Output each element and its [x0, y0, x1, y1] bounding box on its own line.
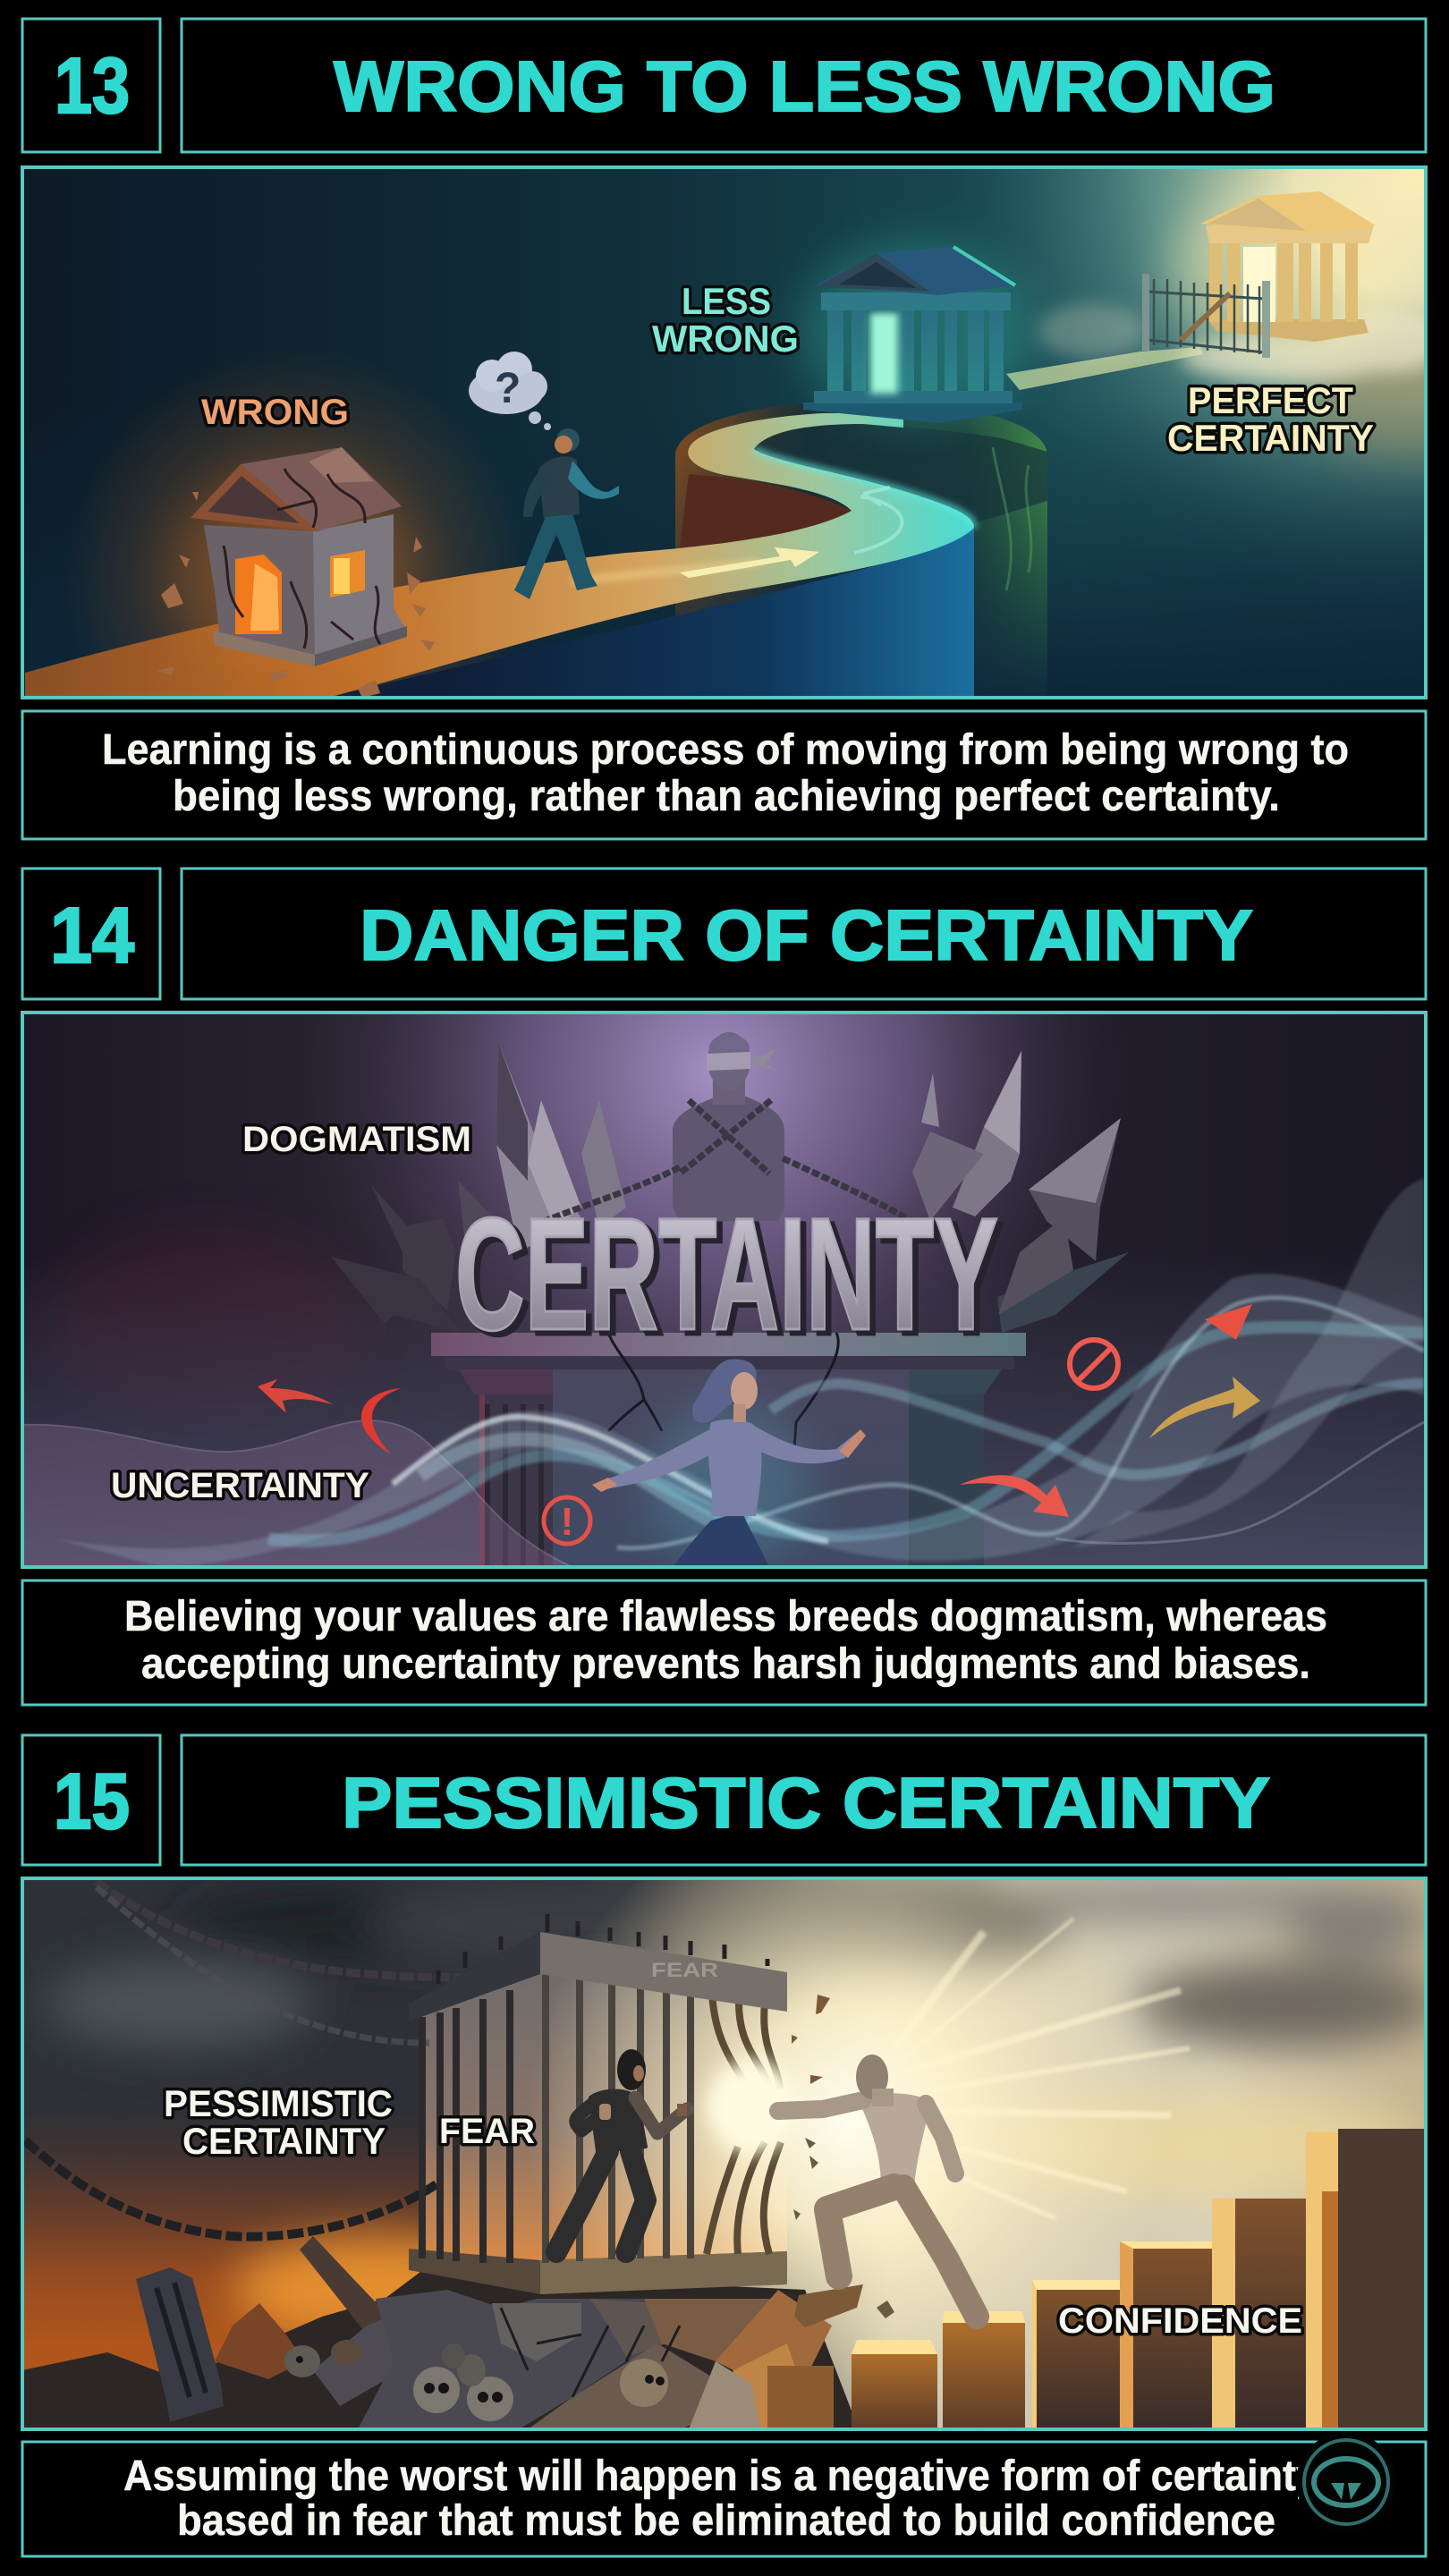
impact burst — [707, 1995, 894, 2318]
label: pessimistic certainty: CERTAINTY — [182, 2120, 386, 2162]
section 13 caption: being less wrong, rather than achieving perfect certainty. — [173, 773, 1280, 820]
glowing steps — [767, 2129, 1426, 2429]
section 13 title: WRONG TO LESS WRONG — [334, 47, 1275, 126]
cliff cylinder — [675, 401, 1047, 698]
block under foot — [794, 2284, 863, 2327]
label: pessimistic certainty — [164, 2082, 393, 2162]
running woman — [592, 1360, 866, 1567]
temple: less wrong — [798, 242, 1030, 423]
flowing uncertainty waves — [22, 1178, 1424, 1567]
warning icon — [544, 1497, 590, 1544]
label: less wrong: WRONG — [652, 318, 799, 360]
panel: wrong to less wrong illustration — [24, 169, 1424, 696]
label: less wrong: LESS — [682, 280, 771, 322]
winding road — [25, 413, 974, 697]
pit — [680, 474, 852, 547]
locked gate — [1142, 274, 1270, 358]
section 15 title: PESSIMISTIC CERTAINTY — [342, 1763, 1270, 1843]
red arc and arrows — [258, 1304, 1260, 1517]
section 13 number box — [22, 19, 160, 152]
rubble fragments — [157, 492, 435, 698]
section 13 caption — [22, 711, 1426, 839]
temple: perfect certainty — [1172, 179, 1404, 358]
section 15 caption: based in fear that must be eliminated to build confidence — [177, 2497, 1275, 2545]
chain 1 — [97, 1882, 499, 1978]
section 15 title — [182, 1735, 1426, 1865]
clouds — [1038, 304, 1449, 381]
path to perfect certainty — [1006, 347, 1203, 390]
section 15 number box: 15 — [54, 1757, 130, 1845]
walking man — [514, 428, 619, 599]
prisoner in cage — [556, 2049, 687, 2252]
section 13 number box: 13 — [55, 41, 130, 130]
carved word certainty: CERTAINTY — [461, 1189, 1004, 1368]
section 14 number box: 14 — [50, 891, 134, 979]
road arrow — [680, 547, 819, 578]
panel: pessimistic certainty illustration — [22, 1798, 1440, 2442]
label: uncertainty: UNCERTAINTY — [111, 1466, 369, 1505]
section 14 number box — [22, 869, 160, 999]
section 14 title: DANGER OF CERTAINTY — [360, 895, 1253, 975]
column and pedestal — [431, 1333, 1026, 1567]
sun rays — [894, 1919, 1190, 2218]
hero figure breaking the cage — [778, 2055, 977, 2317]
section 14 caption: Believing your values are flawless breeds dogmatism, whereas — [124, 1593, 1327, 1640]
carved word certainty — [455, 1184, 1004, 1368]
cracked house — [170, 447, 420, 680]
label: perfect certainty: CERTAINTY — [1167, 417, 1374, 459]
chains on figure — [545, 1100, 917, 1224]
lower blue cliff — [322, 523, 974, 698]
cage — [409, 1914, 787, 2294]
blindfolded figure — [673, 1032, 784, 1221]
cage: FEAR — [651, 1959, 718, 1981]
skull group — [284, 2340, 668, 2421]
icon: logo badge — [1296, 2432, 1396, 2532]
distant chains — [25, 1882, 499, 2237]
thought bubble with question mark — [469, 352, 551, 430]
section 14 caption: accepting uncertainty prevents harsh judgments and biases. — [141, 1640, 1310, 1688]
broken column — [136, 2267, 224, 2422]
skulls — [284, 2340, 668, 2421]
label: pessimistic certainty: PESSIMISTIC — [164, 2082, 393, 2124]
light behind cage bars — [420, 1973, 787, 2263]
section 14 title — [182, 869, 1426, 999]
panel: danger of certainty illustration — [22, 662, 1426, 1567]
label: confidence: CONFIDENCE — [1058, 2301, 1302, 2341]
carved word certainty: CERTAINTY — [455, 1184, 998, 1363]
label: fear: FEAR — [439, 2112, 535, 2151]
thought bubble with question mark: ? — [495, 365, 521, 412]
no sign icon — [1070, 1340, 1118, 1388]
section 15 caption: Assuming the worst will happen is a negative form of certainty — [123, 2453, 1318, 2500]
label: less wrong — [652, 280, 799, 360]
label: dogmatism: DOGMATISM — [242, 1120, 471, 1159]
rubble pile — [22, 2236, 859, 2429]
section 15 number box — [22, 1735, 160, 1865]
section 14 caption — [22, 1580, 1426, 1705]
section 15 caption — [22, 2442, 1426, 2556]
stone spikes — [331, 1042, 1129, 1333]
section 13 caption: Learning is a continuous process of moving from being wrong to — [102, 726, 1349, 774]
label: perfect certainty — [1167, 379, 1374, 459]
label: wrong: WRONG — [201, 393, 349, 432]
section 13 title — [182, 19, 1426, 152]
warning icon: ! — [561, 1500, 573, 1544]
storm and sky clouds — [45, 1869, 1440, 2200]
label: perfect certainty: PERFECT — [1188, 379, 1353, 421]
